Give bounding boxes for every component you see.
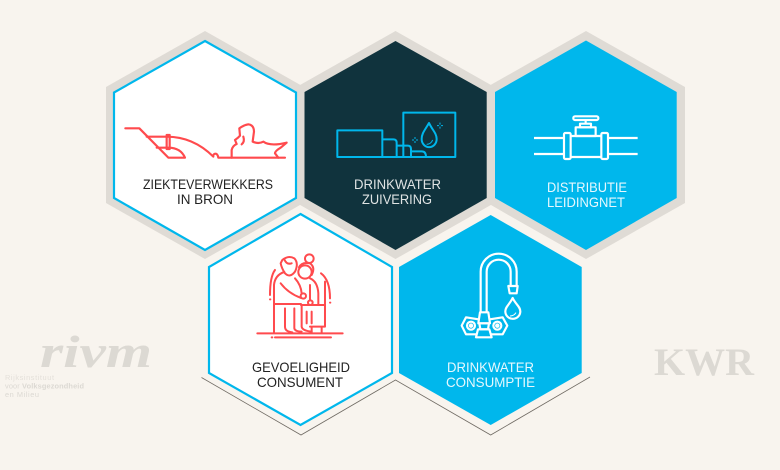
icon: tap with drop	[462, 254, 520, 337]
panel: ziekteverwekkers in bron	[114, 41, 296, 250]
logo: rivm: en Milieu	[5, 390, 39, 399]
panel: distributie leidingnet: LEIDINGNET	[547, 195, 626, 210]
heading: DRINKWATER	[354, 177, 441, 192]
panel: grey hexagon backing, top row	[106, 31, 685, 259]
logo: KWR: KWR	[654, 341, 755, 384]
icon: treatment basins and drop	[337, 113, 455, 157]
logo: rivm: voor Volksgezondheid	[5, 382, 84, 390]
panel: drinkwater zuivering: ZUIVERING	[362, 192, 432, 207]
logo: rivm: Rijksinstituut	[5, 373, 54, 382]
panel: gevoeligheid consument	[209, 214, 392, 425]
heading: DISTRIBUTIE	[547, 180, 627, 195]
icon: elderly couple	[257, 254, 343, 337]
heading: ZIEKTEVERWEKKERS	[143, 177, 273, 192]
panel: drinkwater zuivering	[304, 41, 487, 250]
logo: rivm	[5, 326, 152, 399]
panel: drinkwater consumptie: CONSUMPTIE	[446, 375, 535, 390]
panel: distributie leidingnet	[495, 40, 677, 250]
heading: DRINKWATER	[447, 360, 534, 375]
icon: pipe with valve	[534, 116, 638, 159]
panel: gevoeligheid consument: CONSUMENT	[257, 375, 344, 390]
heading: GEVOELIGHEID	[252, 360, 350, 375]
icon: plough and duck	[125, 124, 287, 158]
logo: rivm: rivm	[40, 326, 152, 377]
panel: cream hexagon backing, bottom row	[201, 205, 590, 435]
panel: ziekteverwekkers in bron: IN BRON	[177, 192, 233, 207]
outline under bottom row	[202, 377, 590, 435]
panel: drinkwater consumptie	[399, 215, 582, 425]
